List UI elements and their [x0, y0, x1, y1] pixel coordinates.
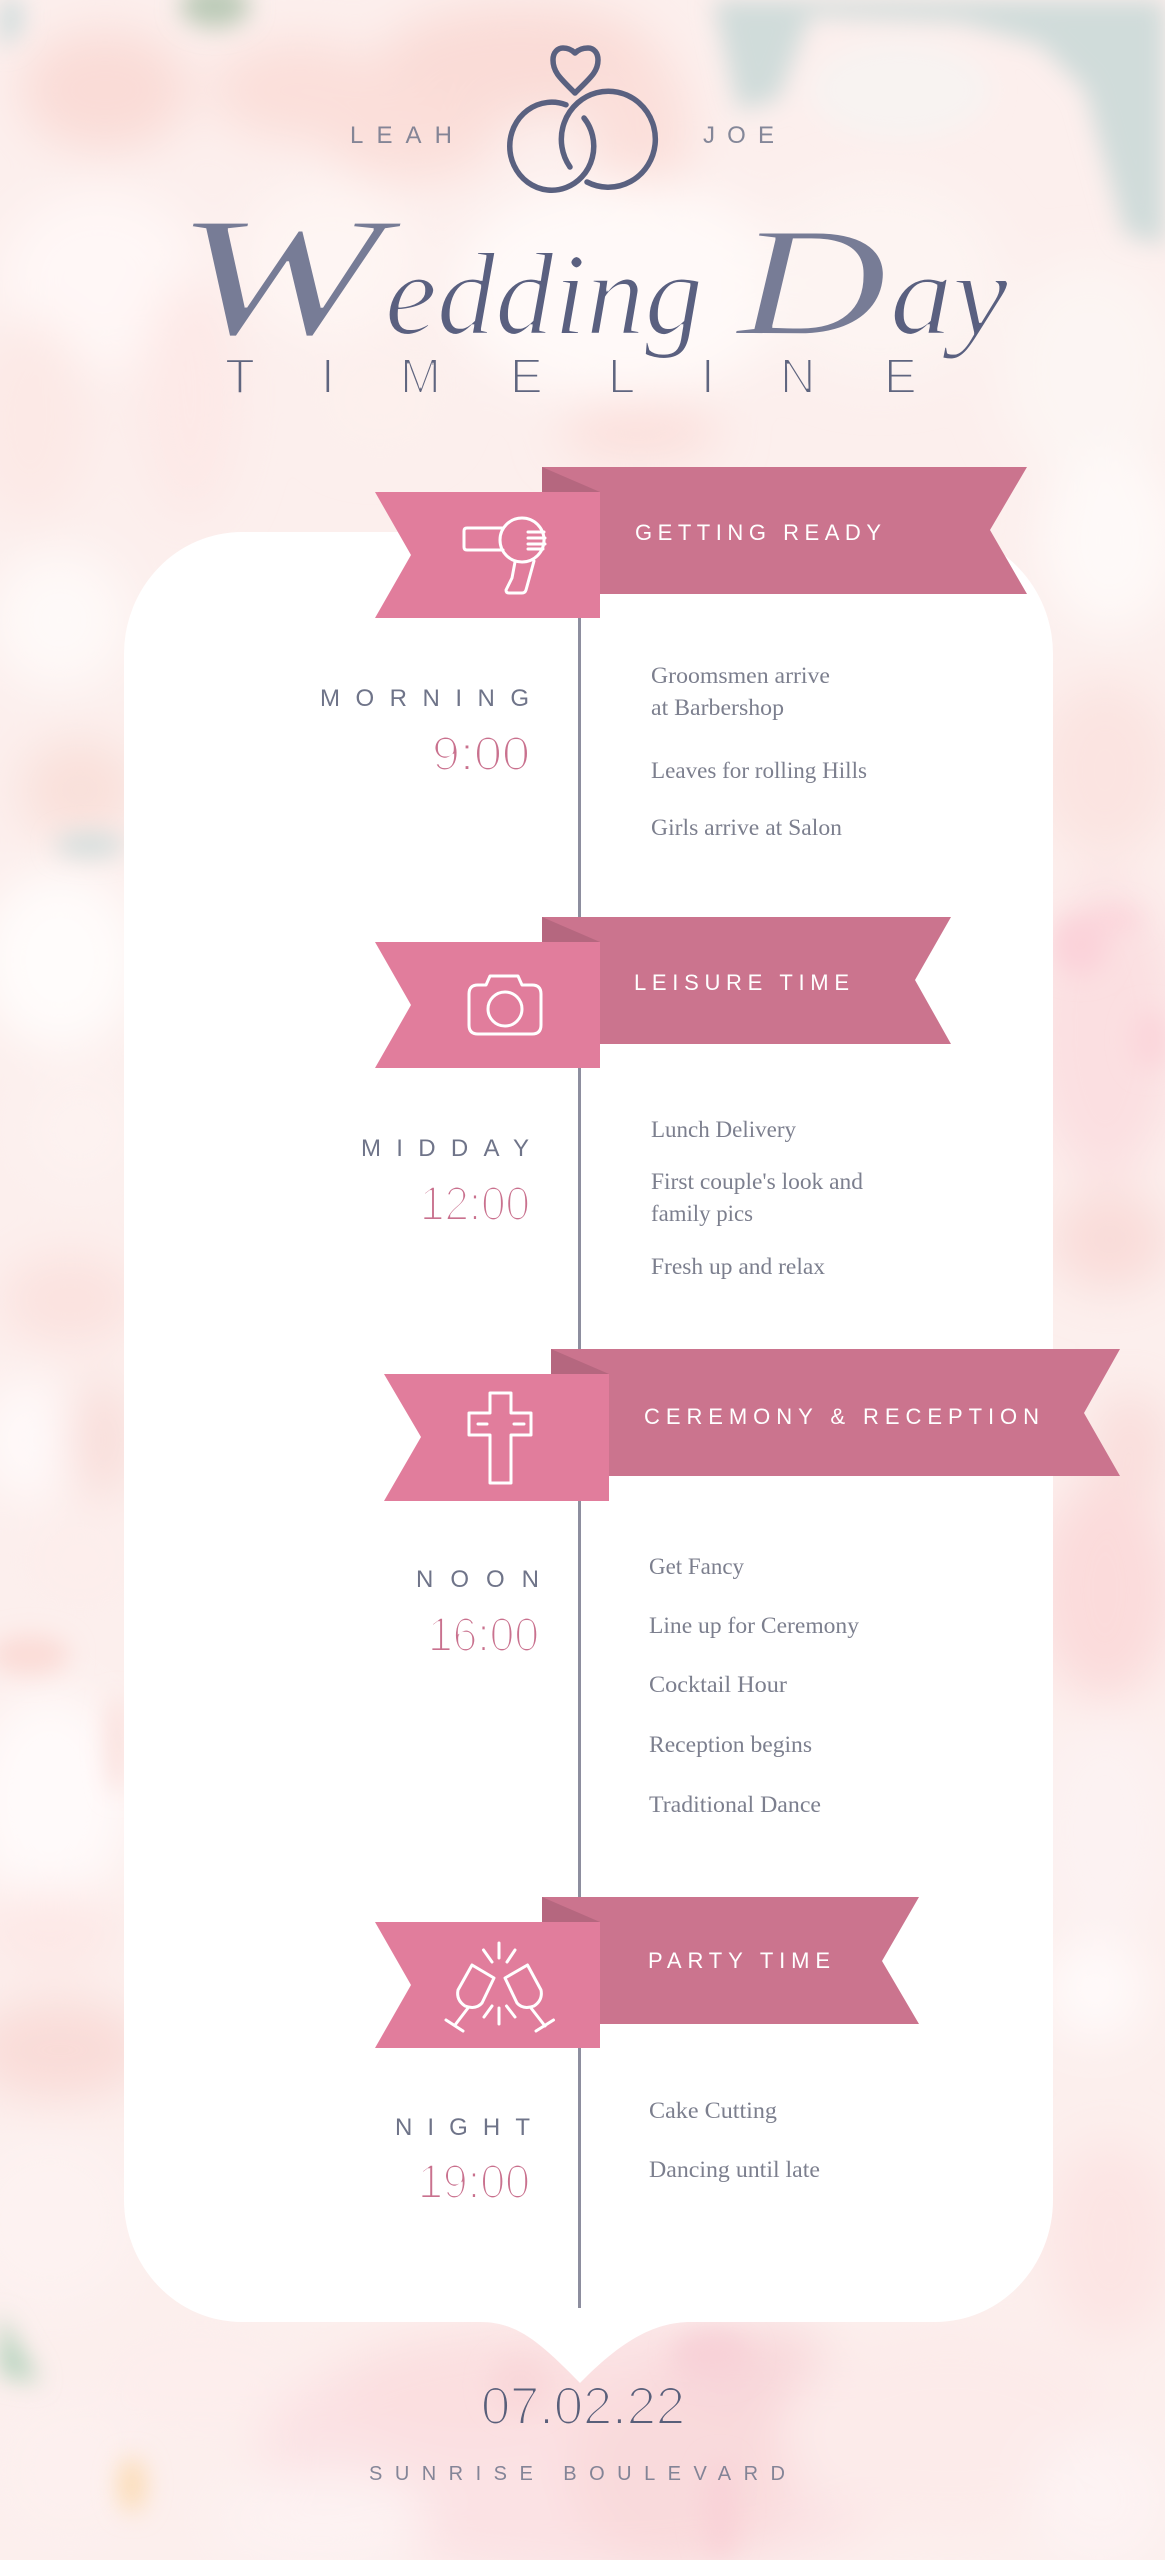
footer: venue: SUNRISE BOULEVARD: [369, 2463, 785, 2485]
list: noon activities: Reception begins: [649, 1732, 812, 1757]
list: night activities: Dancing until late: [649, 2157, 820, 2182]
time: 12:00: 12:00: [420, 1178, 530, 1231]
label: night: NIGHT: [395, 2114, 530, 2141]
ribbon: ceremony back: [551, 1349, 1120, 1476]
list: midday activities: Lunch Delivery: [651, 1117, 796, 1142]
timeline vertical line: [578, 540, 581, 2308]
title: Wedding Day: edding: [385, 229, 703, 360]
label: noon: NOON: [416, 1566, 539, 1593]
name: Leah: LEAH: [350, 122, 452, 149]
list: morning activities: Leaves for rolling Hills: [651, 758, 867, 783]
list: midday activities: Fresh up and relax: [651, 1254, 825, 1279]
panel: white timeline card: [124, 532, 1053, 2383]
list: noon activities: Traditional Dance: [649, 1792, 821, 1817]
list: night activities: [649, 2098, 820, 2182]
list: midday activities: [651, 1117, 864, 1279]
heading: leisure time: LEISURE TIME: [634, 970, 849, 995]
title: Wedding Day: D: [734, 196, 887, 368]
list: morning activities: at Barbershop: [651, 695, 784, 720]
list: noon activities: Line up for Ceremony: [649, 1613, 860, 1638]
time: 19:00: 19:00: [418, 2156, 530, 2209]
ribbon fold: [542, 917, 600, 942]
list: morning activities: Groomsmen arrive: [651, 663, 830, 688]
list: noon activities: Cocktail Hour: [649, 1672, 787, 1697]
ribbon fold: [542, 467, 600, 492]
name: Joe: JOE: [703, 122, 774, 149]
label: morning: MORNING: [320, 685, 529, 712]
list: night activities: Cake Cutting: [649, 2098, 778, 2123]
ribbon fold: [542, 1897, 600, 1922]
list: morning activities: Girls arrive at Salon: [651, 815, 843, 840]
title: Wedding Day: W: [175, 183, 403, 371]
time: 16:00: 16:00: [428, 1609, 539, 1662]
ribbon: ceremony front: [384, 1374, 609, 1501]
ribbon fold: [551, 1349, 609, 1374]
subtitle: Timeline: TIMELINE: [225, 350, 917, 404]
list: noon activities: Get Fancy: [649, 1554, 744, 1579]
icon: rings and heart: [510, 48, 655, 190]
ribbon: leisure time back: [542, 917, 951, 1044]
icon: cross: [469, 1393, 531, 1483]
icon: hair dryer: [464, 518, 545, 593]
icon: champagne glasses: [446, 1943, 554, 2031]
footer: date: 07.02.22: [481, 2377, 685, 2436]
list: morning activities: [651, 663, 867, 840]
ribbon: party time front: [375, 1922, 600, 2048]
ribbon: getting ready front: [375, 492, 600, 618]
section: party time: [375, 1897, 919, 2209]
time: 9:00: 9:00: [432, 728, 530, 781]
heading: getting ready: GETTING READY: [635, 520, 881, 545]
list: midday activities: First couple's look and: [651, 1169, 864, 1194]
list: midday activities: family pics: [651, 1201, 753, 1226]
title: Wedding Day: ay: [890, 229, 1009, 360]
heading: party time: PARTY TIME: [648, 1948, 830, 1973]
list: noon activities: [649, 1554, 860, 1817]
icon: camera: [469, 976, 541, 1034]
heading: ceremony and reception: CEREMONY & RECEPTION: [644, 1404, 1039, 1429]
ribbon: party time back: [542, 1897, 919, 2024]
ribbon: getting ready back: [542, 467, 1027, 594]
label: midday: MIDDAY: [361, 1135, 529, 1162]
ribbon: leisure time front: [375, 942, 600, 1068]
section: leisure time: [361, 917, 951, 1279]
header: couple names and rings: [350, 48, 774, 190]
section: ceremony and reception: [384, 1349, 1120, 1817]
section: getting ready: [320, 467, 1027, 840]
